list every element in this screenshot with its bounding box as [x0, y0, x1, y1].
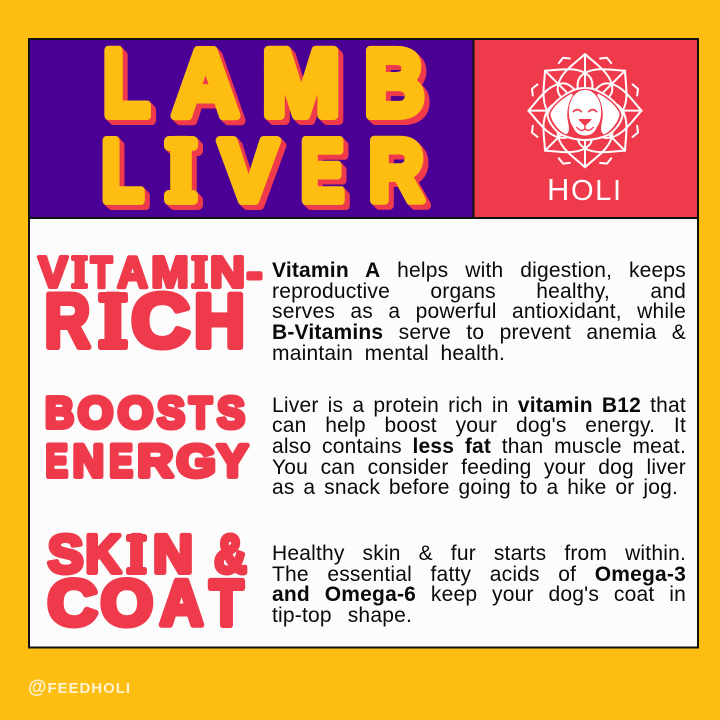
text block: Vitamin-Rich: maintain mental health. — [272, 342, 505, 365]
text block: Skin & Coat: The essential fatty acids of Omega-3 — [272, 563, 686, 586]
title: LAMB LIVER: M — [262, 30, 340, 136]
title: LAMB LIVER: R — [369, 122, 424, 220]
title: LAMB LIVER: I — [169, 122, 193, 220]
dog head — [547, 88, 623, 140]
heading: Boosts Energy: O — [118, 388, 153, 438]
text block: Boosts Energy: as a snack before going to a hike or jog. — [272, 476, 678, 499]
heading: Boosts Energy: T — [189, 388, 212, 438]
heading: Boosts Energy: O — [78, 388, 113, 438]
heading: Skin & Coat: O — [101, 567, 153, 639]
text block: Skin & Coat: tip-top shape. — [272, 604, 412, 627]
heading: Vitamin-Rich: A — [118, 248, 148, 297]
heading: Skin & Coat: N — [153, 524, 193, 584]
text block: Vitamin-Rich: B-Vitamins serve to prevent anemia & — [272, 321, 686, 344]
heading: Vitamin-Rich: T — [91, 248, 112, 297]
text block: Skin & Coat: Healthy skin & fur starts from within. — [272, 542, 686, 565]
title: LAMB LIVER: B — [364, 30, 424, 136]
heading: Vitamin-Rich: I — [74, 248, 86, 297]
heading: Boosts Energy — [45, 388, 248, 486]
heading: Boosts Energy: S — [157, 388, 185, 438]
text block: Vitamin-Rich: Vitamin A helps with digestion, keeps — [272, 259, 686, 282]
logo: Holi dog mandala — [526, 51, 644, 170]
text block: Skin & Coat: and Omega-6 keep your dog's coat in — [272, 583, 686, 606]
heading: Skin & Coat: K — [85, 524, 121, 584]
title: LAMB LIVER: L — [102, 122, 143, 220]
panel: logo — [474, 39, 698, 217]
mandala petals — [526, 51, 644, 170]
text block: Boosts Energy — [272, 394, 686, 499]
heading: Vitamin-Rich: M — [151, 248, 189, 297]
panel: title — [29, 39, 473, 217]
heading: Vitamin-Rich: R — [44, 279, 90, 364]
panel: content — [29, 218, 698, 648]
social handle: @FEEDHOLI — [28, 677, 130, 698]
text block: Boosts Energy: can help boost your dog's energy. It — [272, 414, 686, 437]
heading: Boosts Energy: G — [176, 436, 216, 486]
heading: Boosts Energy: E — [46, 436, 68, 486]
text block: Boosts Energy: Liver is a protein rich in vitamin B12 that — [272, 394, 686, 417]
text block: Vitamin-Rich — [272, 259, 686, 365]
title: LAMB LIVER: L — [103, 30, 150, 136]
heading: Vitamin-Rich: I — [194, 248, 206, 297]
title: LAMB LIVER: V — [220, 122, 278, 220]
heading: Vitamin-Rich: I — [102, 279, 124, 364]
heading: Skin & Coat: T — [210, 567, 243, 639]
text block: Skin & Coat — [272, 542, 686, 627]
heading: Boosts Energy: E — [109, 436, 133, 486]
heading: Vitamin-Rich: - — [247, 248, 262, 297]
logo wordmark: HOLI — [547, 172, 621, 207]
heading: Vitamin-Rich — [38, 248, 262, 364]
heading: Boosts Energy: R — [137, 436, 173, 486]
heading: Boosts Energy: N — [73, 436, 104, 486]
title: LAMB LIVER — [102, 30, 424, 220]
text block: Boosts Energy: also contains less fat than muscle meat. — [272, 435, 686, 458]
heading: Vitamin-Rich: V — [38, 248, 68, 297]
text block: Boosts Energy: You can consider feeding your dog liver — [272, 456, 686, 479]
heading: Boosts Energy: Y — [217, 436, 248, 486]
heading: Skin & Coat: A — [160, 567, 203, 639]
text block: Vitamin-Rich: serves as a powerful antioxidant, while — [272, 300, 686, 323]
heading: Vitamin-Rich: H — [194, 279, 245, 364]
headings — [38, 248, 262, 639]
heading: Skin & Coat: & — [214, 524, 247, 584]
heading: Vitamin-Rich: N — [210, 248, 245, 297]
heading: Skin & Coat: I — [129, 524, 144, 584]
heading: Vitamin-Rich: C — [131, 279, 190, 364]
title: LAMB LIVER: E — [301, 122, 344, 220]
heading: Boosts Energy: S — [217, 388, 245, 438]
heading: Skin & Coat — [48, 524, 247, 639]
frame — [29, 39, 698, 648]
heading: Skin & Coat: C — [48, 567, 97, 639]
heading: Skin & Coat: S — [48, 524, 84, 584]
heading: Boosts Energy: B — [45, 388, 74, 438]
text block: Vitamin-Rich: reproductive organs healthy, and — [272, 280, 686, 303]
title: LAMB LIVER: A — [172, 30, 239, 136]
